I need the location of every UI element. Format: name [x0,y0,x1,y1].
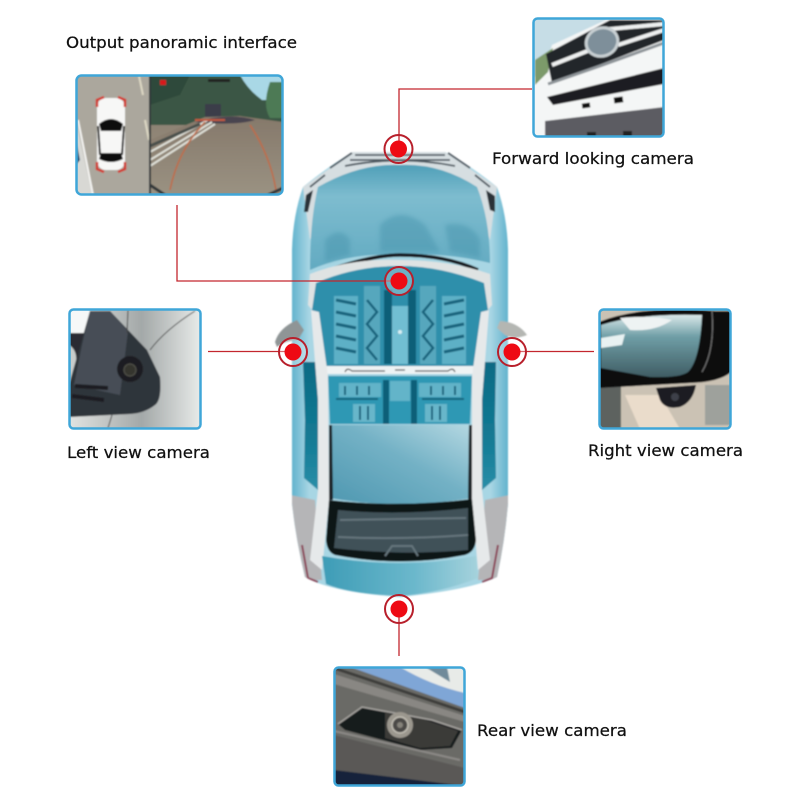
car right headlight [486,190,495,212]
car front interior [312,266,488,366]
panel: panoramic interface photo [76,75,283,195]
connector: left camera [208,350,293,352]
marker: right camera [498,338,526,366]
car illustration [275,152,527,597]
car rear interior [328,376,472,424]
label: rear view camera: Rear view camera [477,721,627,740]
car rear seats pattern [336,380,464,424]
car left side window [303,362,319,490]
car left mirror [275,320,304,347]
car body shell [292,152,508,597]
car left headlight [304,190,313,212]
connector: panoramic interface to windshield [177,205,399,281]
car roof band detail [345,369,455,372]
car windshield frame [308,260,492,312]
panel: rear camera photo [334,667,465,786]
panel: left camera photo [69,309,201,429]
car left pillar [310,310,329,570]
car hood detail [325,215,480,262]
car right pillar [472,310,490,570]
title: output panoramic interface: Output panoramic interface [66,33,297,52]
car rear window dark frame [329,425,472,500]
panel: forward camera photo [533,18,664,137]
car wiper line [335,255,478,270]
car trunk lid [322,556,478,596]
car rear window glass [326,499,476,562]
marker: rear camera [385,595,413,623]
car rear shelf detail [338,518,468,556]
label: left view camera: Left view camera [67,443,210,462]
connector: rear camera [398,609,400,656]
car right side window [481,362,496,490]
panel: right camera photo [599,309,731,429]
car front seats pattern [334,286,466,364]
car rear window roof panel [329,425,472,504]
car rear shelf [334,508,468,553]
car front grille and fenders [303,152,497,240]
connector: right camera [512,350,594,352]
marker: left camera [279,338,307,366]
label: right view camera: Right view camera [588,441,743,460]
car lower grey flanks [290,495,510,582]
marker: forward camera [384,135,412,163]
connector: forward camera [399,89,532,148]
label: forward looking camera: Forward looking camera [492,149,694,168]
marker: panoramic processor [385,267,413,295]
car front grille detail [310,153,490,187]
car roof band [320,366,482,374]
car right mirror [497,321,527,338]
car hood [310,165,490,270]
